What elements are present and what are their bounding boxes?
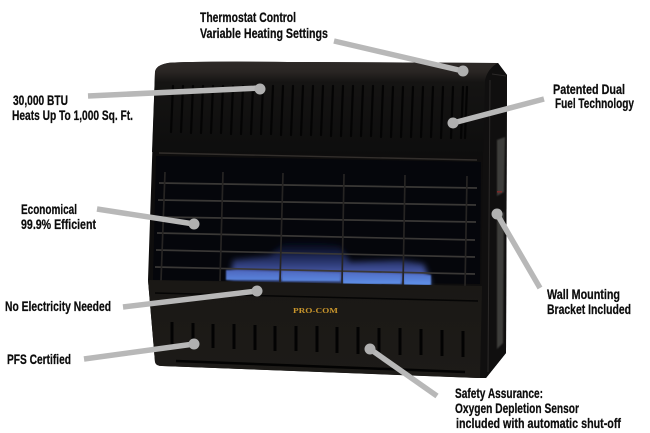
- callout: BTU: Heats Up To 1,000 Sq. Ft.: [12, 107, 133, 123]
- callout: dual fuel: [448, 81, 634, 128]
- callout: economical: [21, 201, 200, 232]
- heater side panel: [480, 63, 507, 378]
- callout: safety assurance: [364, 344, 621, 431]
- heater body silhouette: [148, 62, 507, 378]
- callout: wall mounting: Wall Mounting: [547, 286, 620, 302]
- callout: safety assurance: Oxygen Depletion Sensor: [455, 400, 579, 416]
- top vent slots: [171, 86, 467, 138]
- callout: no electricity: No Electricity Needed: [5, 298, 111, 314]
- blue flames: [226, 240, 431, 285]
- bottom edge of heater: [176, 361, 465, 372]
- brand label: PRO-COM: [293, 306, 338, 315]
- callout: PFS certified: PFS Certified: [7, 351, 71, 367]
- heater: [148, 62, 507, 378]
- callout: thermostat control: Variable Heating Settings: [200, 25, 328, 41]
- callout: thermostat control: Thermostat Control: [200, 9, 296, 25]
- callout: thermostat control: [200, 9, 468, 76]
- callout: BTU: [12, 84, 266, 123]
- callout: safety assurance: Safety Assurance:: [455, 385, 543, 401]
- callout: no electricity: [5, 286, 262, 314]
- callout: economical: 99.9% Efficient: [21, 216, 96, 232]
- wire grill: [155, 172, 477, 287]
- callout: dual fuel: Patented Dual: [553, 81, 625, 97]
- callout: BTU: 30,000 BTU: [13, 92, 68, 108]
- callout: wall mounting: [492, 208, 631, 317]
- firebox window: [153, 156, 481, 284]
- lower vent slots: [172, 322, 463, 357]
- callout: PFS certified: [7, 338, 200, 367]
- lower front panel: [148, 280, 482, 378]
- callout: economical: Economical: [21, 201, 77, 217]
- heater top panel: [152, 62, 498, 156]
